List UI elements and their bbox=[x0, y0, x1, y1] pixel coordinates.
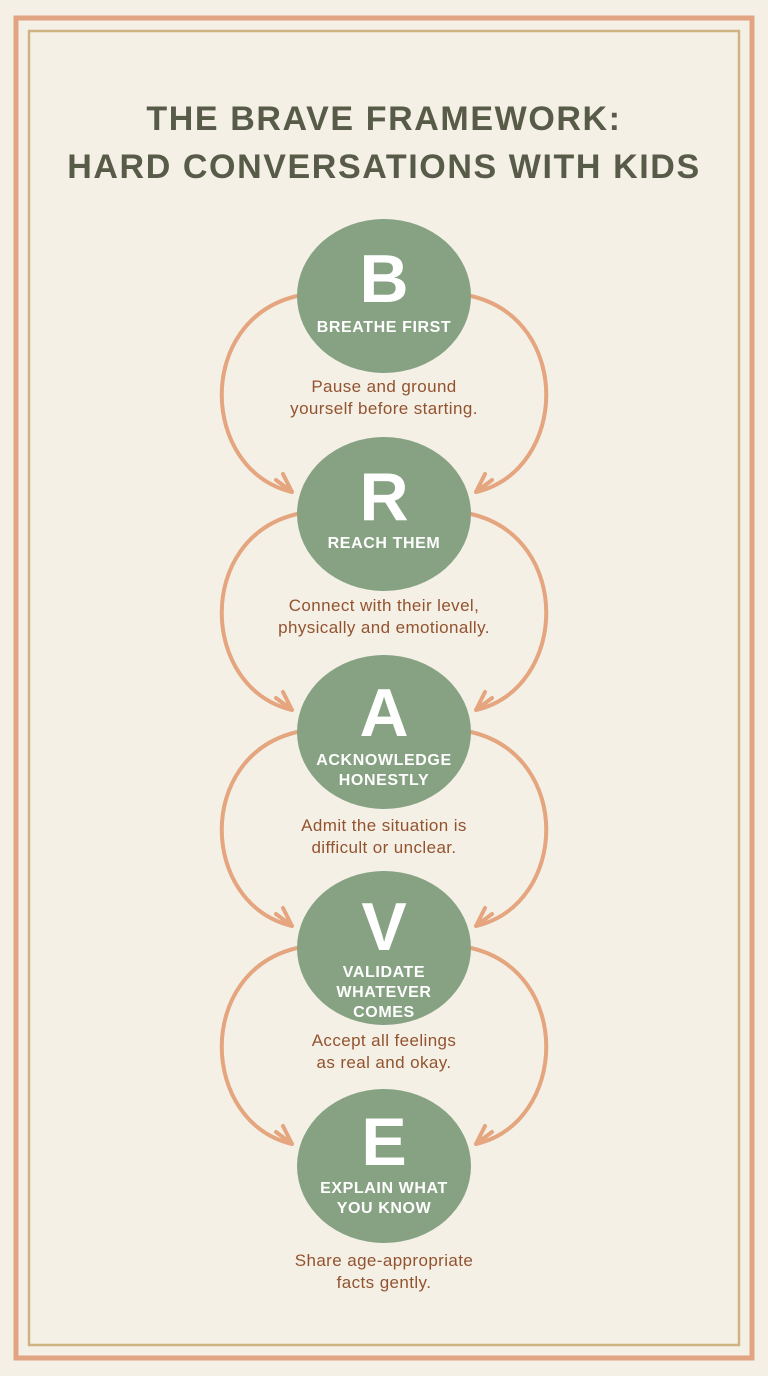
step A: HONESTLY bbox=[339, 772, 429, 789]
step V: as real and okay. bbox=[316, 1053, 452, 1072]
step R: physically and emotionally. bbox=[278, 618, 490, 637]
step E: YOU KNOW bbox=[337, 1200, 432, 1217]
step B: B bbox=[359, 241, 409, 317]
step V: COMES bbox=[353, 1004, 415, 1021]
step B: Pause and ground bbox=[311, 377, 457, 396]
step E: facts gently. bbox=[337, 1273, 431, 1292]
step E: E bbox=[361, 1104, 407, 1180]
step R: REACH THEM bbox=[328, 535, 440, 552]
step E bbox=[295, 1089, 473, 1292]
title: THE BRAVE FRAMEWORK: bbox=[146, 100, 622, 138]
step R bbox=[278, 437, 490, 637]
title bbox=[67, 100, 701, 186]
step A bbox=[297, 655, 471, 857]
step A: Admit the situation is bbox=[301, 816, 467, 835]
title: HARD CONVERSATIONS WITH KIDS bbox=[67, 148, 701, 186]
step V: Accept all feelings bbox=[312, 1031, 456, 1050]
step V: WHATEVER bbox=[336, 984, 432, 1001]
step B: BREATHE FIRST bbox=[317, 319, 451, 336]
step V: VALIDATE bbox=[343, 964, 425, 981]
step E: EXPLAIN WHAT bbox=[320, 1180, 448, 1197]
step A: ACKNOWLEDGE bbox=[316, 752, 452, 769]
arrows bbox=[222, 296, 546, 1144]
step R: Connect with their level, bbox=[289, 596, 479, 615]
step R: R bbox=[359, 459, 409, 535]
step V: V bbox=[361, 889, 407, 965]
step V bbox=[297, 871, 471, 1072]
step A: difficult or unclear. bbox=[311, 838, 457, 857]
step E: Share age-appropriate bbox=[295, 1251, 473, 1270]
step B: yourself before starting. bbox=[290, 399, 478, 418]
step B bbox=[290, 219, 478, 418]
step A: A bbox=[359, 675, 409, 751]
